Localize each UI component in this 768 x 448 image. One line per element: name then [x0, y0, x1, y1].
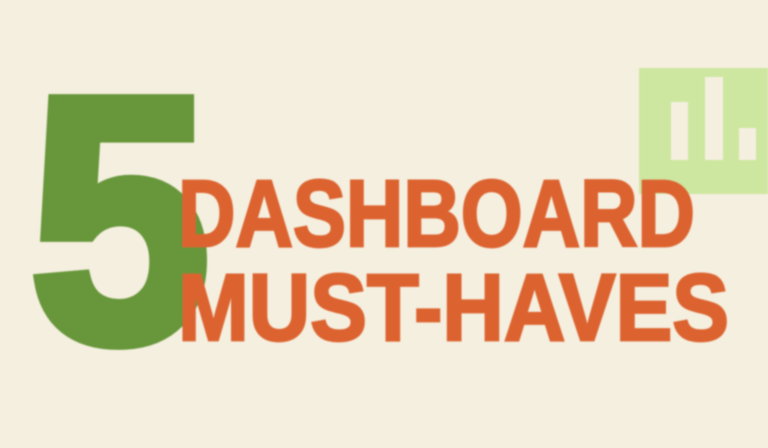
big numeral 5: 5 [30, 25, 210, 414]
icon: bar chart tile [639, 68, 768, 194]
heading: dashboard must-haves [178, 161, 729, 361]
